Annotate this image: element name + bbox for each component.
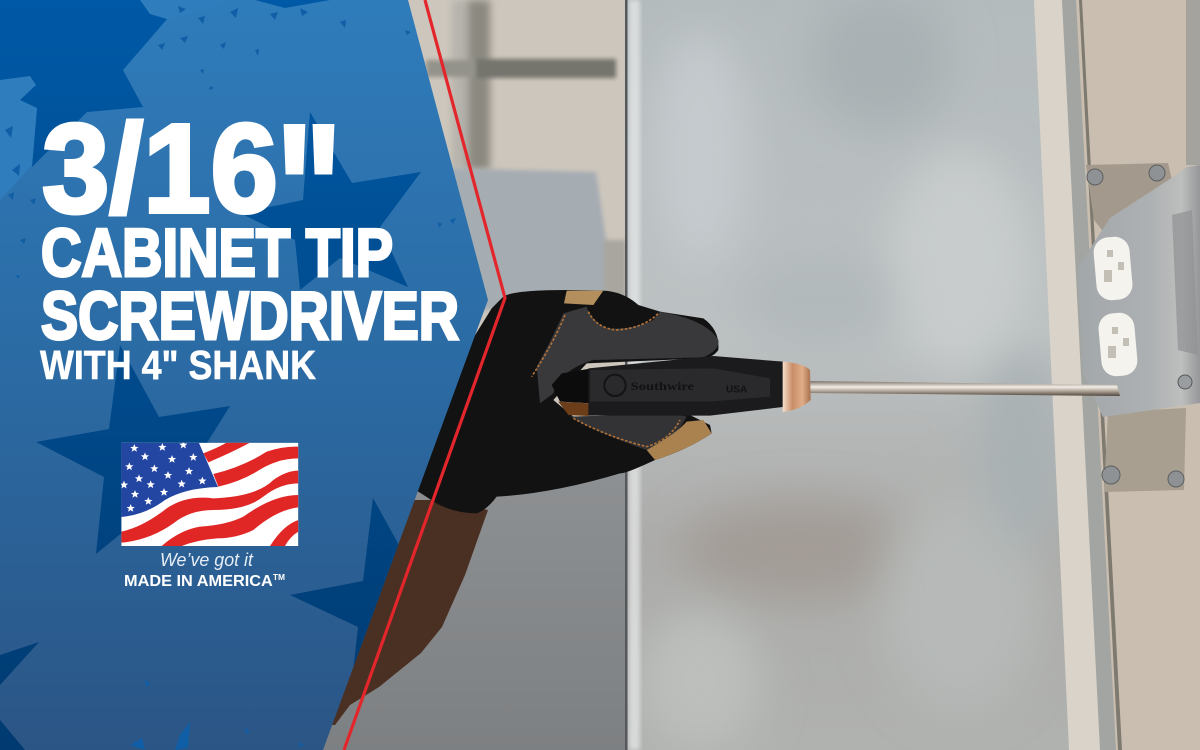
photo background [300, 0, 630, 750]
tan patch bottom [647, 420, 712, 460]
inch mark: " [276, 87, 342, 294]
arm [310, 500, 488, 725]
headline [40, 87, 459, 388]
cabinet tip: CABINET TIP [41, 215, 393, 291]
logo mark [604, 375, 626, 396]
flag canton [121, 443, 218, 517]
amber handle core [558, 402, 590, 416]
handle grip [590, 368, 770, 402]
duct reflections [640, 0, 1060, 750]
metal channel [1062, 0, 1116, 750]
outlet box [1078, 165, 1200, 417]
outlet top [1092, 236, 1134, 301]
size fraction: 3/16 [42, 98, 278, 239]
beige stud [1034, 0, 1102, 750]
glove body [410, 290, 718, 513]
blue panel [0, 0, 488, 750]
with shank: WITH 4" SHANK [40, 342, 316, 388]
canton stars [120, 441, 206, 512]
glove padded finger [537, 307, 718, 403]
stars and grunge [0, 0, 470, 750]
outlet slots [1104, 250, 1129, 358]
box embossed ridge [1172, 210, 1198, 355]
screwdriver shaft [808, 381, 1120, 396]
wall bracket [426, 59, 616, 78]
copper ferrule [783, 362, 811, 412]
duct light edge [629, 0, 640, 750]
box screw [1178, 375, 1192, 389]
glove padded thumb [570, 414, 687, 450]
lower gray cabinet [300, 440, 628, 750]
screwdriver: SCREWDRIVER [41, 278, 459, 354]
star lower left [36, 345, 230, 554]
star top sliver [255, 0, 330, 8]
orange stitching [532, 312, 680, 447]
made in america: TM [273, 573, 285, 582]
made in usa mark: USA [726, 385, 747, 396]
glove and screwdriver handle [410, 290, 811, 513]
star middle right [240, 112, 421, 290]
handle rear [552, 368, 592, 403]
made in america: MADE IN AMERICA [124, 573, 266, 590]
galvanized duct [627, 0, 1077, 750]
blurred gray cabinet [440, 168, 626, 310]
star lower right [290, 498, 398, 666]
wall post and conduit [452, 0, 490, 170]
star top left [0, 0, 168, 167]
brand: Southwire [631, 379, 695, 393]
star bottom left [0, 642, 39, 750]
red divider line [344, 0, 505, 750]
american flag [120, 441, 298, 546]
speckles [5, 6, 456, 750]
lower mounting bracket [1104, 408, 1186, 492]
upper mounting bracket [1086, 163, 1172, 240]
flag stripes [121, 443, 298, 546]
flexible conduit [1186, 0, 1200, 165]
right wall [1034, 0, 1200, 750]
flag tagline: We’ve got it [160, 550, 254, 570]
outlet bottom [1097, 312, 1139, 377]
tan patch top [564, 291, 603, 305]
bracket screws [1087, 165, 1184, 487]
handle [588, 356, 786, 416]
lighter grunge top [0, 0, 168, 200]
